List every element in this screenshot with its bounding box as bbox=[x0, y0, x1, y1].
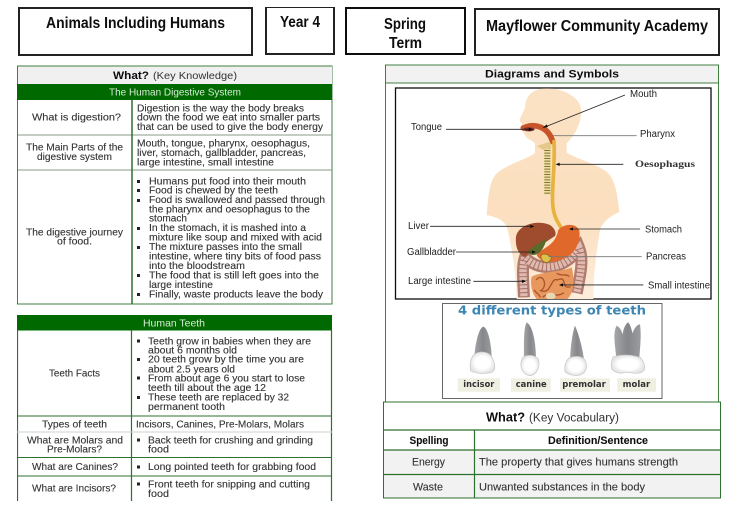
row: main parts of the digestive system: The Main Parts of the bbox=[26, 142, 123, 154]
row: types of teeth: Types of teeth bbox=[42, 420, 107, 430]
school name box: Mayflower Community Academy bbox=[486, 18, 708, 35]
row: teeth facts: permanent tooth bbox=[148, 402, 225, 413]
row: main parts of the digestive system bbox=[26, 138, 310, 168]
panel: key vocabulary table bbox=[383, 402, 721, 498]
row: canines bbox=[32, 462, 316, 473]
icon: mouth and pharynx bbox=[523, 126, 553, 142]
diagram labels: Large intestine bbox=[408, 276, 472, 287]
row: molars and pre-molars: What are Molars and bbox=[27, 436, 123, 446]
row: teeth facts: about 2.5 years old bbox=[148, 364, 235, 376]
heading: key vocabulary: (Key Vocabulary) bbox=[529, 412, 619, 424]
row: teeth facts: about 6 months old bbox=[148, 346, 237, 356]
row: molars and pre-molars: Pre-Molars? bbox=[47, 444, 102, 456]
row: incisors bbox=[32, 480, 310, 500]
row: canines: Long pointed teeth for grabbing food bbox=[148, 462, 316, 473]
heading: human teeth bbox=[17, 315, 332, 330]
pointer lines bbox=[430, 95, 643, 285]
heading: key knowledge bbox=[18, 66, 332, 84]
column headers: Definition/Sentence bbox=[548, 435, 648, 447]
icon: liver bbox=[516, 223, 556, 257]
diagram labels: Liver bbox=[408, 221, 430, 232]
row: digestive journey of food: of food. bbox=[57, 236, 92, 248]
term box: Term bbox=[389, 35, 422, 52]
row: digestive journey of food: Food is swallowed and passed through bbox=[149, 195, 325, 206]
column headers: Spelling bbox=[410, 435, 449, 447]
row: teeth facts: From about age 6 you start to lose bbox=[148, 374, 305, 384]
row: molars and pre-molars: food bbox=[148, 444, 169, 456]
row: digestive journey of food: intestine, where tiny bits of food pass bbox=[149, 252, 321, 262]
diagram labels: Pharynx bbox=[640, 129, 675, 140]
heading: key knowledge: (Key Knowledge) bbox=[153, 71, 237, 82]
row: main parts of the digestive system: digestive system bbox=[37, 152, 112, 163]
tooth name labels: molar bbox=[623, 379, 651, 389]
row: digestive journey of food: large intestine bbox=[149, 280, 213, 291]
row: digestive journey of food: Humans put food into their mouth bbox=[149, 176, 306, 188]
row: digestive journey of food: the pharynx and oesophagus to the bbox=[149, 204, 310, 216]
panel: diagrams and symbols bbox=[386, 65, 718, 402]
row: digestive journey of food: stomach bbox=[149, 214, 187, 224]
heading: the human digestive system bbox=[17, 84, 332, 100]
diagram labels: Pancreas bbox=[646, 252, 686, 262]
row: types of teeth bbox=[42, 420, 304, 430]
row: teeth facts: teeth till about the age 12 bbox=[148, 383, 266, 394]
icon: premolar bbox=[565, 326, 587, 375]
diagram labels: Oesophagus bbox=[635, 160, 695, 170]
year box bbox=[266, 7, 334, 54]
row: teeth facts: Teeth Facts bbox=[49, 368, 100, 380]
row: digestive journey of food bbox=[26, 176, 325, 300]
tooth name labels bbox=[458, 378, 656, 392]
row: what is digestion: What is digestion? bbox=[32, 112, 121, 124]
row: incisors: food bbox=[148, 489, 169, 500]
heading: key vocabulary bbox=[486, 410, 619, 424]
row: what is digestion bbox=[32, 104, 324, 133]
panel: key knowledge table bbox=[17, 66, 332, 304]
icon: oesophagus bbox=[552, 140, 563, 230]
icon: large intestine bbox=[523, 248, 581, 297]
panel: human teeth table bbox=[17, 315, 332, 501]
icon: stomach bbox=[537, 225, 580, 262]
row: teeth facts bbox=[49, 336, 311, 413]
diagram labels: Gallbladder bbox=[407, 247, 457, 258]
row: what is digestion: down the food we eat into smaller parts bbox=[137, 112, 320, 124]
digestive system diagram bbox=[396, 88, 711, 299]
row: what is digestion: Digestion is the way the body breaks bbox=[137, 104, 304, 114]
vocabulary row: energy: Energy bbox=[412, 456, 445, 468]
school name box bbox=[475, 9, 719, 55]
icon: small intestine bbox=[531, 267, 574, 299]
row: main parts of the digestive system: large intestine, small intestine bbox=[137, 158, 274, 168]
row: digestive journey of food: In the stomach, it is mashed into a bbox=[149, 223, 306, 234]
teeth types diagram bbox=[442, 302, 662, 398]
icon: molar bbox=[611, 322, 645, 373]
title box: Animals Including Humans: Animals Including Humans bbox=[46, 15, 225, 32]
row: teeth facts: These teeth are replaced by 32 bbox=[148, 392, 289, 404]
vocabulary row: waste: Waste bbox=[413, 482, 443, 494]
heading: diagrams and symbols bbox=[386, 66, 718, 83]
icon: human body silhouette bbox=[487, 88, 619, 299]
row: digestive journey of food: into the bloodstream bbox=[149, 261, 245, 272]
row: digestive journey of food: The food that is still left goes into the bbox=[149, 270, 319, 282]
row: digestive journey of food: The mixture passes into the small bbox=[149, 242, 302, 253]
diagram labels: Mouth bbox=[630, 89, 657, 100]
heading: key vocabulary: What? bbox=[486, 410, 525, 424]
row: molars and pre-molars bbox=[27, 436, 313, 456]
row: what is digestion: that can be used to give the body energy bbox=[137, 122, 324, 133]
diagram labels bbox=[407, 89, 711, 292]
title box: Animals Including Humans bbox=[19, 8, 252, 55]
icon: incisor bbox=[470, 327, 495, 373]
icon: pancreas bbox=[541, 254, 552, 263]
row: digestive journey of food: Food is chewed by the teeth bbox=[149, 186, 278, 196]
teeth types diagram: 4 different types of teeth bbox=[458, 302, 646, 318]
diagram labels: Small intestine bbox=[648, 280, 711, 292]
row: main parts of the digestive system: liver, stomach, gallbladder, pancreas, bbox=[137, 148, 306, 159]
heading: the human digestive system: The Human Digestive System bbox=[109, 88, 241, 98]
year box: Year 4 bbox=[280, 14, 320, 31]
row: molars and pre-molars: Back teeth for crushing and grinding bbox=[148, 436, 313, 446]
row: digestive journey of food: Finally, waste products leave the body bbox=[149, 290, 324, 300]
icon: gallbladder bbox=[528, 238, 547, 255]
pointer arrowheads bbox=[522, 124, 573, 287]
row: teeth facts: Teeth grow in babies when they are bbox=[148, 336, 311, 348]
term box bbox=[346, 8, 465, 54]
column headers bbox=[410, 435, 648, 447]
row: main parts of the digestive system: Mouth, tongue, pharynx, oesophagus, bbox=[137, 138, 310, 150]
row: canines: What are Canines? bbox=[32, 462, 118, 473]
row: teeth facts: 20 teeth grow by the time you are bbox=[148, 354, 304, 366]
row: digestive journey of food: The digestive journey bbox=[26, 228, 124, 238]
tooth name labels: premolar bbox=[562, 379, 607, 389]
vocabulary row: energy: The property that gives humans strength bbox=[479, 456, 678, 468]
vocabulary row: waste: Unwanted substances in the body bbox=[479, 482, 645, 494]
diagram labels: Stomach bbox=[645, 224, 682, 236]
row: types of teeth: Incisors, Canines, Pre-Molars, Molars bbox=[136, 420, 304, 430]
tooth name labels: canine bbox=[516, 379, 547, 389]
icon: canine bbox=[521, 322, 539, 376]
row: digestive journey of food: mixture like soup and mixed with acid bbox=[149, 232, 322, 244]
icon: trachea bbox=[544, 148, 551, 195]
heading: diagrams and symbols: Diagrams and Symbols bbox=[485, 68, 619, 80]
heading: key knowledge: What? bbox=[113, 70, 149, 82]
diagram labels: Tongue bbox=[411, 122, 443, 133]
row: incisors: What are Incisors? bbox=[32, 484, 116, 494]
tooth name labels: incisor bbox=[463, 379, 495, 389]
row: incisors: Front teeth for snipping and cutting bbox=[148, 480, 310, 490]
heading: human teeth: Human Teeth bbox=[143, 318, 205, 330]
term box: Spring bbox=[384, 16, 426, 33]
